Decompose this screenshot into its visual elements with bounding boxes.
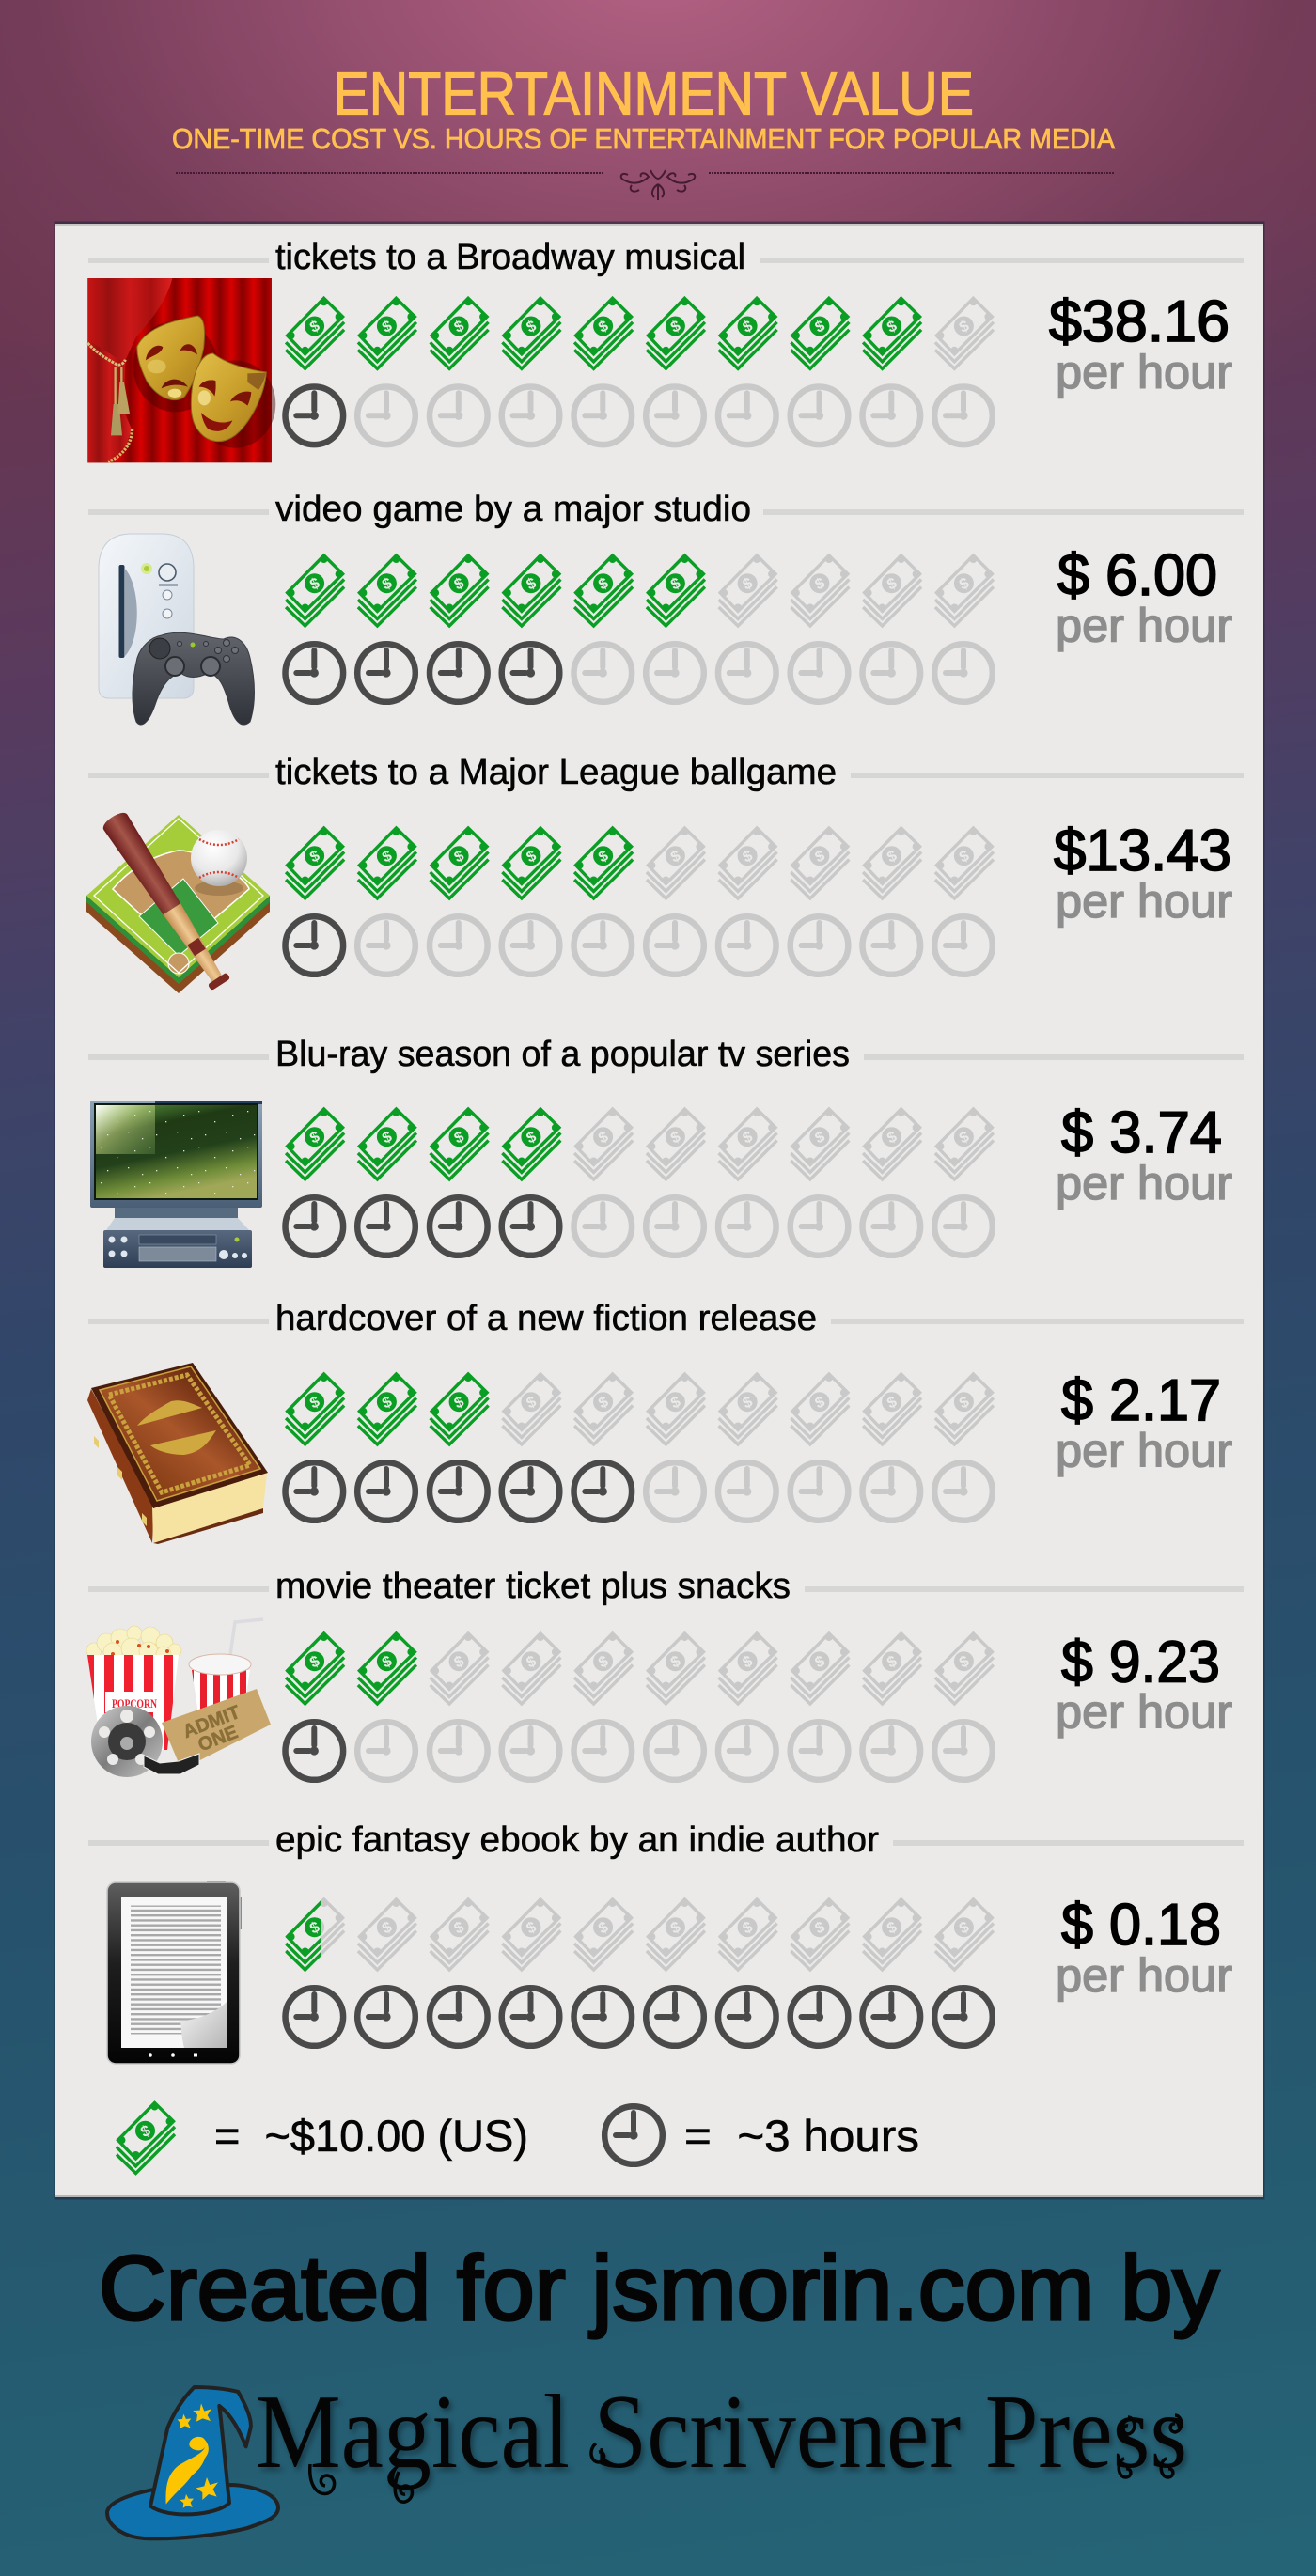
row: indie ebook xyxy=(88,1820,1244,2064)
money icons: half of 1 of 10 xyxy=(286,1899,994,1970)
wordmark: Magical Scrivener Press xyxy=(256,2374,1187,2490)
icon: leather book xyxy=(87,1363,268,1544)
legend xyxy=(117,2103,919,2173)
heading: video game by a major studio xyxy=(275,490,751,529)
heading: tickets to a Major League ballgame xyxy=(275,753,837,792)
icon: theatre masks xyxy=(87,278,275,462)
panel background xyxy=(55,222,1265,2199)
icon: ebook tablet xyxy=(107,1881,242,2064)
price: $ 9.23 xyxy=(1061,1630,1220,1695)
money icons: 4 of 10 xyxy=(286,1109,994,1179)
clock icons: 4 of 10 xyxy=(286,644,993,702)
ornamental divider xyxy=(176,170,1114,200)
price: $38.16 xyxy=(1049,289,1230,354)
legend clock icon xyxy=(604,2106,663,2164)
per hour label: per hour xyxy=(1056,1686,1232,1739)
icon: popcorn, drink, film reel and ticket: POPCORN xyxy=(112,1696,157,1710)
icon: wizard hat xyxy=(107,2387,278,2538)
title: ENTERTAINMENT VALUE xyxy=(333,60,974,128)
heading: Blu-ray season of a popular tv series xyxy=(275,1035,850,1074)
per hour label: per hour xyxy=(1056,1949,1232,2002)
price: $ 2.17 xyxy=(1061,1368,1221,1433)
price: $ 3.74 xyxy=(1061,1101,1222,1165)
per hour label: per hour xyxy=(1056,1425,1232,1477)
row: video game xyxy=(88,490,1244,725)
row: hardcover fiction xyxy=(87,1299,1244,1544)
credit line: Created for jsmorin.com by xyxy=(99,2237,1219,2339)
row: Blu-ray season xyxy=(88,1035,1244,1268)
money icons: 2 of 10 xyxy=(286,1633,994,1704)
icon: popcorn, drink, film reel and ticket: ADMIT xyxy=(180,1702,243,1742)
heading: movie theater ticket plus snacks xyxy=(275,1567,791,1606)
clock icons: 1 of 10 xyxy=(286,916,993,975)
per hour label: per hour xyxy=(1056,875,1232,928)
per hour label: per hour xyxy=(1056,346,1232,398)
subtitle: ONE-TIME COST VS. HOURS OF ENTERTAINMENT FOR POPULAR MEDIA xyxy=(172,122,1115,155)
legend clock text: = ~3 hours xyxy=(684,2111,919,2161)
logo: Magical Scrivener Press xyxy=(107,2374,1187,2538)
price: $ 0.18 xyxy=(1061,1893,1221,1958)
icon: television and blu-ray player xyxy=(90,1101,262,1268)
icon: popcorn, drink, film reel and ticket: ONE xyxy=(196,1722,241,1756)
heading: hardcover of a new fiction release xyxy=(275,1299,817,1338)
legend money icon xyxy=(117,2103,175,2173)
clock icons: 1 of 10 xyxy=(286,1722,993,1780)
money icons: 6 of 10 xyxy=(286,555,994,626)
icon: popcorn, drink, film reel and ticket xyxy=(86,1619,271,1777)
legend money text: = ~$10.00 (US) xyxy=(214,2111,528,2161)
per hour label: per hour xyxy=(1056,600,1232,652)
heading: tickets to a Broadway musical xyxy=(275,238,745,277)
panel: media comparison xyxy=(55,222,1265,2199)
clock icons: 4 of 10 xyxy=(286,1197,993,1256)
per hour label: per hour xyxy=(1056,1157,1232,1210)
icon: game console and controller xyxy=(99,534,254,725)
clock icons: 10 of 10 xyxy=(286,1988,993,2046)
row: Major League ballgame xyxy=(86,753,1244,993)
clock icons: 1 of 10 xyxy=(286,387,993,445)
wordmark swirls xyxy=(310,2415,1182,2502)
heading: epic fantasy ebook by an indie author xyxy=(275,1820,879,1860)
clock icons: 5 of 10 xyxy=(286,1462,993,1521)
price: $ 6.00 xyxy=(1058,543,1217,608)
money icons: 5 of 10 xyxy=(286,828,994,898)
price: $13.43 xyxy=(1054,819,1231,883)
money icons: 3 of 10 xyxy=(286,1374,994,1444)
icon: baseball field, bat and ball xyxy=(86,809,270,993)
row: movie theater xyxy=(86,1567,1244,1780)
row: Broadway musical xyxy=(87,238,1244,462)
money icons: 9 of 10 xyxy=(286,298,994,368)
